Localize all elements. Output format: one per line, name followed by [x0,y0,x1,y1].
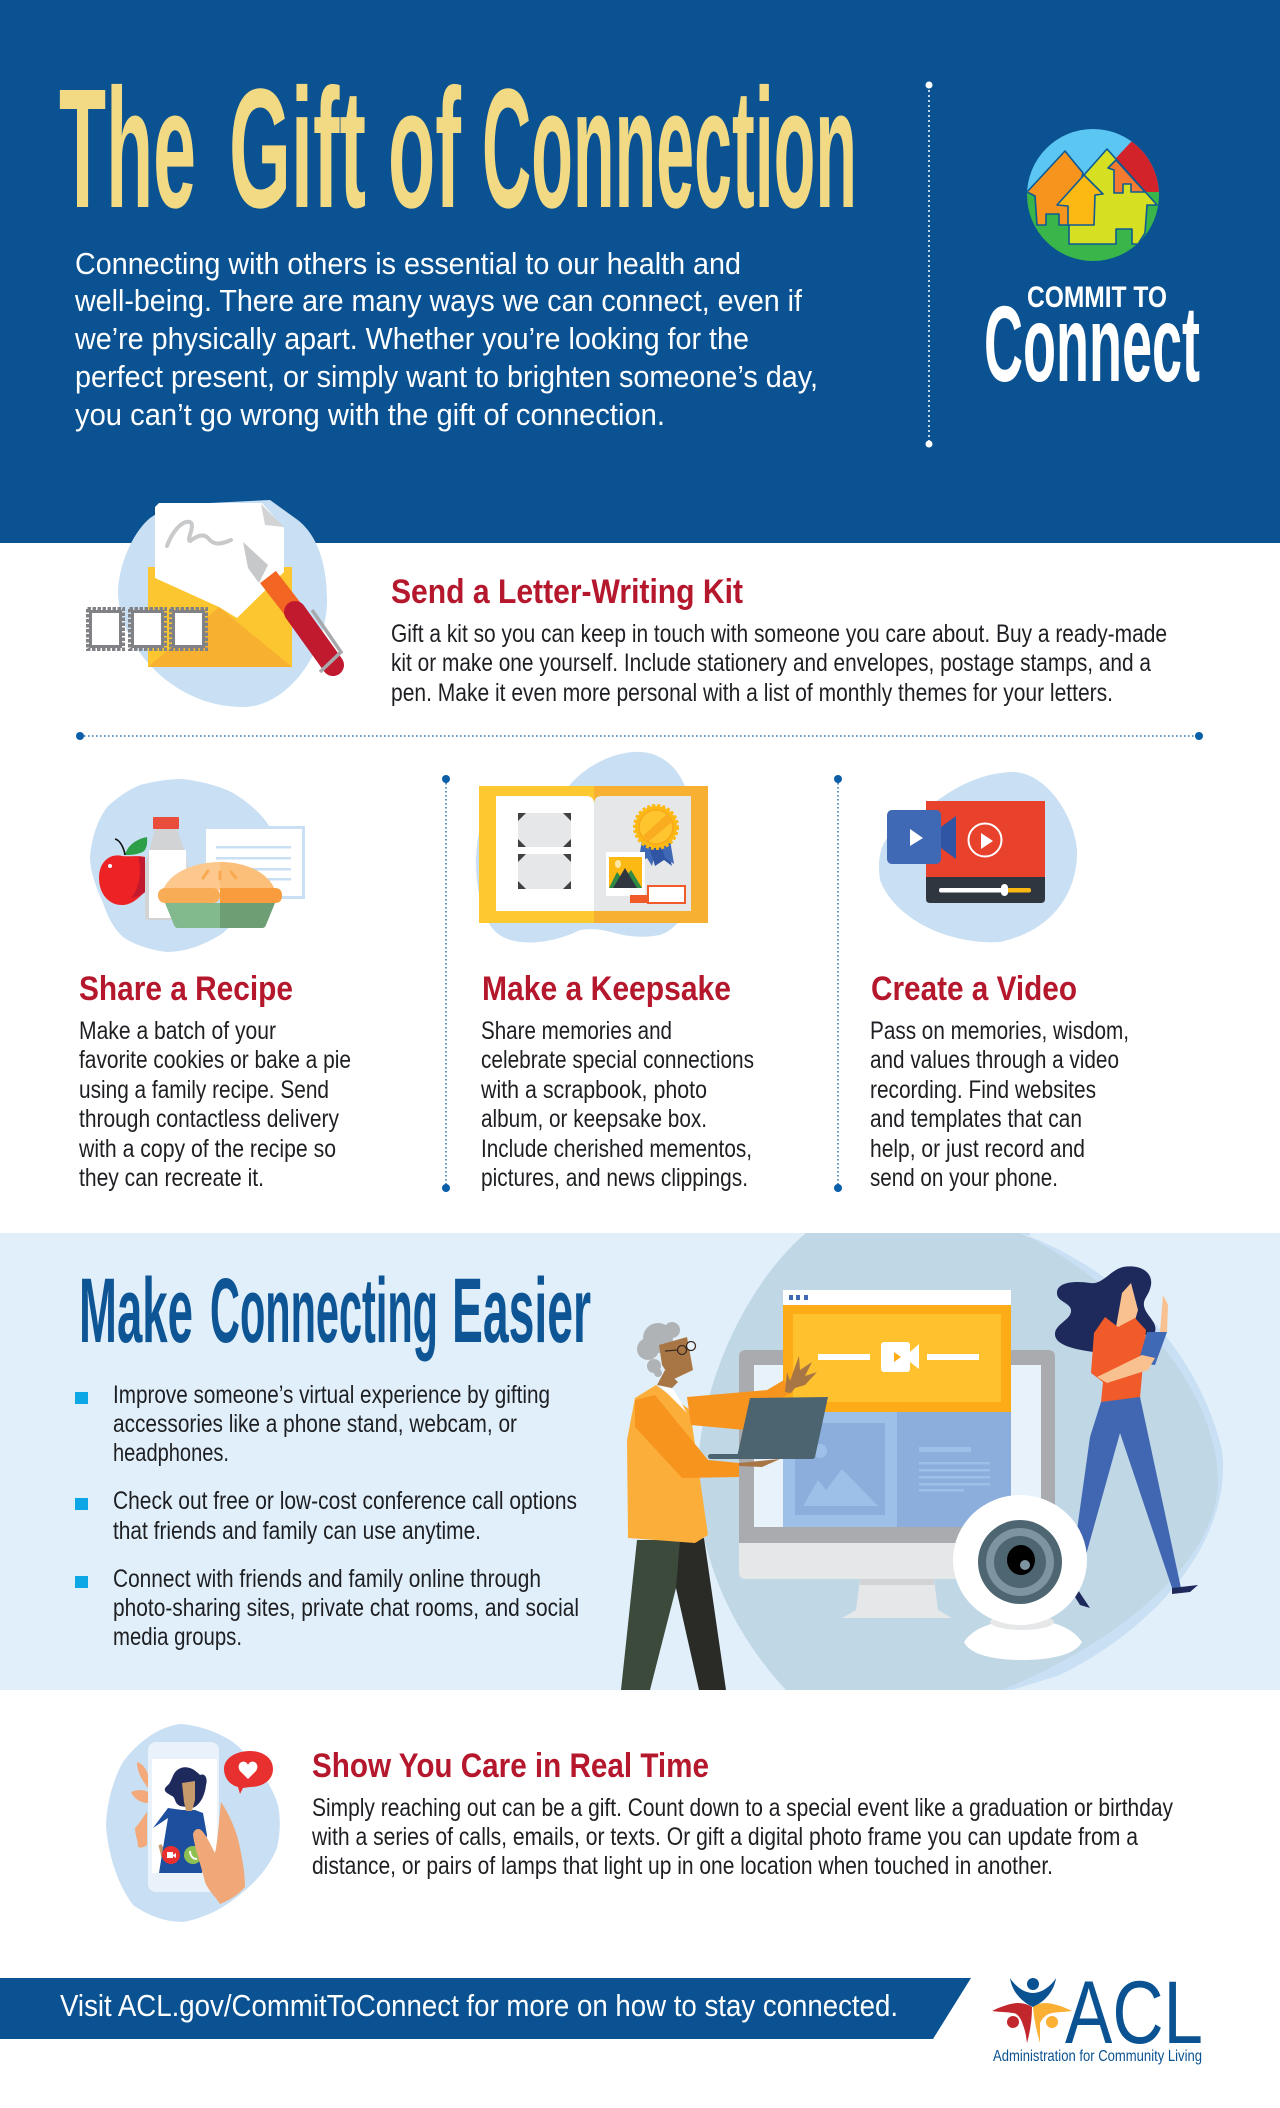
header vertical divider [926,82,932,448]
text: video body: and values through a video [870,1046,1119,1074]
heading: Make a Keepsake: Make a Keepsake [482,970,731,1008]
text: keepsake body [480,1017,754,1192]
heading: Send a Letter-Writing Kit: Send a Letter-Writing Kit [391,573,743,611]
text: recipe body: they can recreate it. [79,1164,264,1192]
logo: ACL: Administration for Community Living [993,2048,1202,2065]
footer banner [0,1978,971,2039]
icon: scrapbook [476,752,708,942]
text: letter-writing kit body: pen. Make it even more personal with a list of monthly themes for your letters. [391,679,1113,707]
divider: column rule 1 [442,775,450,1192]
text: keepsake body: Share memories and [481,1017,672,1045]
text: recipe body: favorite cookies or bake a pie [79,1046,351,1074]
list: connecting tips: media groups. [113,1623,242,1651]
panel: make a keepsake [476,752,754,1192]
panel: header [0,0,1280,543]
heading: Create a Video: Create a Video [871,970,1077,1008]
illustration: video call scene [621,1233,1223,1690]
list: connecting tips: accessories like a phone stand, webcam, or [113,1410,517,1438]
person: man with laptop [621,1322,828,1690]
heading: Make Connecting Easier: Easier [452,1260,591,1362]
panel: create a video [870,772,1129,1192]
text: video body: Pass on memories, wisdom, [870,1017,1129,1045]
text: keepsake body: with a scrapbook, photo [480,1076,707,1104]
heading: Make Connecting Easier [79,1260,591,1362]
text: video body: send on your phone. [870,1164,1058,1192]
list: connecting tips: Connect with friends and family online through [113,1565,541,1593]
footer banner: Visit ACL.gov/CommitToConnect for more on how to stay connected. [60,1988,898,2023]
icon: pie, milk, apple and recipe card [90,779,304,952]
panel: make connecting easier [0,1233,1280,1690]
intro text [74,246,818,432]
title: Gift [229,54,366,244]
list: connecting tips [75,1381,579,1651]
video window [783,1290,1011,1412]
heading: Make Connecting Easier: Make [79,1260,193,1362]
text: video body: and templates that can [870,1105,1082,1133]
title: of [388,54,461,244]
logo: ACL [992,1962,1203,2065]
icon: Commit to Connect logo: COMMIT TO [1027,281,1167,314]
text: recipe body: Make a batch of your [79,1017,276,1045]
heading: Show You Care in Real Time: Show You Care in Real Time [312,1747,709,1785]
icon: letter, pen and stamps [88,500,341,707]
text: letter-writing kit body [391,620,1167,707]
text: keepsake body: celebrate special connections [481,1046,754,1074]
logo: ACL: ACL [1065,1962,1203,2062]
intro text: perfect present, or simply want to brighten someone’s day, [75,359,818,394]
intro text: we’re physically apart. Whether you’re looking for the [74,321,749,356]
background blob [698,1233,1223,1690]
intro text: Connecting with others is essential to our health and [75,246,741,281]
panel: letter-writing kit [88,500,1167,707]
text: recipe body: using a family recipe. Send [79,1076,329,1104]
heading: Share a Recipe: Share a Recipe [79,970,293,1008]
icon: phone video call [106,1724,280,1922]
title: The [59,54,196,244]
text: video body: recording. Find websites [870,1076,1096,1104]
icon: video player and camera [879,772,1077,942]
panel: show you care in real time [106,1724,1173,1922]
text: keepsake body: album, or keepsake box. [481,1105,707,1133]
title [59,54,857,244]
list: connecting tips: Improve someone’s virtual experience by gifting [113,1381,550,1409]
list: connecting tips: photo-sharing sites, private chat rooms, and social [113,1594,579,1622]
intro text: you can’t go wrong with the gift of connection. [75,397,665,432]
text: recipe body: through contactless delivery [79,1105,339,1133]
divider: column rule 2 [834,775,842,1192]
text: keepsake body: pictures, and news clippings. [481,1164,748,1192]
list: connecting tips: that friends and family can use anytime. [113,1517,481,1545]
monitor [739,1350,1055,1618]
text: recipe body: with a copy of the recipe so [78,1135,336,1163]
text: letter-writing kit body: kit or make one yourself. Include stationery and envelopes, postage stamps, and a [391,649,1151,677]
heading: Make Connecting Easier: Connecting [210,1260,438,1362]
panel: share a recipe [78,779,351,1192]
text: keepsake body: Include cherished mementos, [481,1135,752,1163]
icon: Commit to Connect logo [984,129,1200,404]
text: real time body: distance, or pairs of lamps that light up in one location when touched in another. [312,1852,1053,1880]
text: real time body [311,1794,1173,1880]
text: video body [870,1017,1129,1192]
text: recipe body [78,1017,351,1192]
webcam [953,1495,1087,1660]
list: connecting tips: Check out free or low-cost conference call options [113,1487,577,1515]
text: real time body: with a series of calls, emails, or texts. Or gift a digital photo frame you can update from a [311,1823,1138,1851]
intro text: well-being. There are many ways we can connect, even if [74,283,802,318]
divider: horizontal dotted line [76,732,1203,740]
list: connecting tips: headphones. [113,1439,229,1467]
person: woman with tablet [1055,1266,1198,1608]
text: video body: help, or just record and [870,1135,1085,1163]
